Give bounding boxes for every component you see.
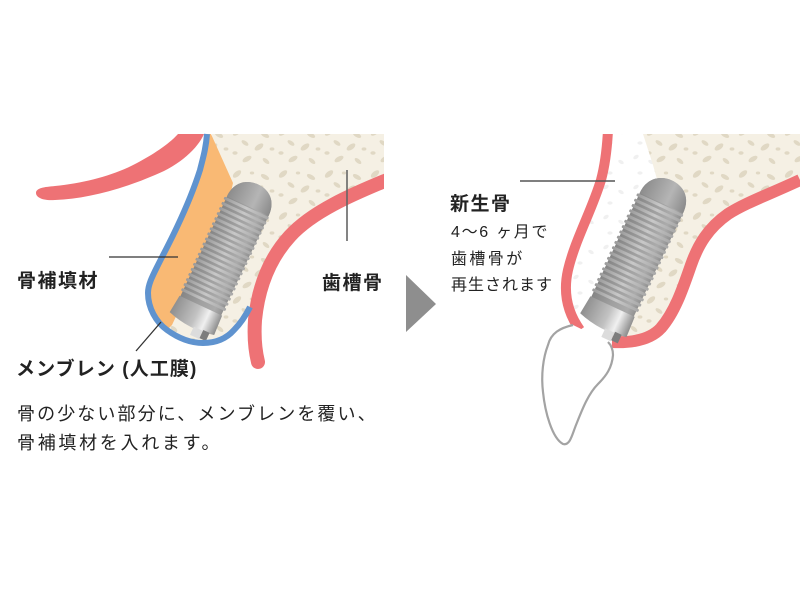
panel: after treatment — [450, 130, 800, 444]
alveolar bone — [167, 134, 384, 343]
new bone — [568, 134, 660, 335]
upper gum — [36, 134, 204, 200]
description — [17, 403, 378, 453]
description — [451, 224, 553, 294]
label: new bone: 新生骨 — [450, 193, 512, 215]
membrane — [148, 134, 250, 343]
gum: left — [566, 130, 608, 330]
description: 4〜6 ヶ月で — [451, 224, 549, 241]
label: alveolar bone: 歯槽骨 — [322, 272, 384, 294]
arrow — [406, 275, 436, 332]
description: 再生されます — [451, 276, 553, 294]
lower gum — [255, 178, 392, 362]
gum: right — [612, 180, 800, 342]
alveolar bone — [612, 134, 800, 342]
leader: bone graft — [109, 256, 178, 258]
description: 骨補填材を入れます。 — [17, 433, 222, 453]
description: 歯槽骨が — [451, 250, 525, 268]
implant: left — [165, 173, 280, 344]
description: 骨の少ない部分に、メンブレンを覆い、 — [17, 403, 378, 424]
leader: alveolar bone — [346, 170, 348, 241]
bone graft material — [148, 134, 233, 330]
tooth crown — [542, 325, 613, 444]
leader: membrane — [136, 322, 161, 351]
implant: right — [575, 169, 695, 347]
label: membrane: メンブレン (人工膜) — [16, 357, 197, 380]
panel: before treatment — [16, 134, 392, 453]
label: bone graft: 骨補填材 — [17, 270, 99, 292]
leader: new bone — [520, 180, 615, 182]
